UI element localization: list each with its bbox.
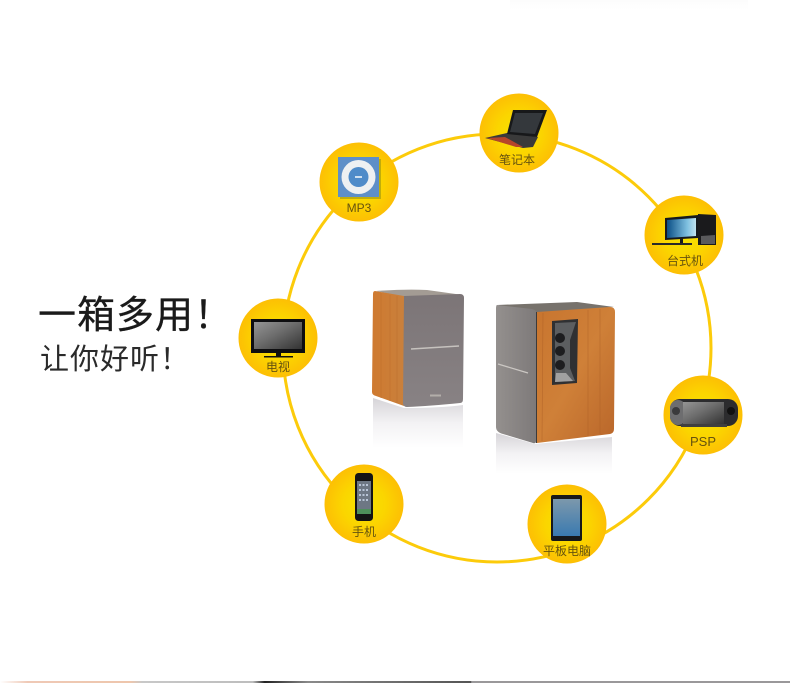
headline: 一箱多用！ <box>38 295 233 337</box>
icon: tablet <box>551 495 582 541</box>
icon: television <box>251 319 305 358</box>
subheading: 让你好听！ <box>40 343 190 376</box>
left speaker <box>372 290 464 407</box>
badge: MP3: MP3 <box>347 201 372 215</box>
icon: MP3 player <box>338 157 381 199</box>
faint top shadow <box>510 0 748 10</box>
badge: TV: 电视 <box>266 359 290 374</box>
badge: laptop: 笔记本 <box>499 152 535 167</box>
badge: phone: 手机 <box>352 525 376 539</box>
icon: laptop <box>485 110 547 148</box>
icon: smartphone <box>355 473 373 521</box>
badge: phone <box>324 464 404 544</box>
icon: desktop computer <box>652 214 716 245</box>
badge: PSP <box>664 376 742 454</box>
badge: TV <box>238 298 318 378</box>
badge: tablet: 平板电脑 <box>543 544 591 558</box>
icon: PSP console <box>670 399 738 427</box>
badge: MP3 <box>320 142 398 222</box>
bottom image strip <box>0 681 790 683</box>
badge: desktop <box>644 196 724 274</box>
connecting ring <box>283 134 711 562</box>
badge: desktop: 台式机 <box>667 253 703 268</box>
badge: tablet <box>528 484 606 564</box>
right speaker reflection <box>496 433 612 474</box>
badge: laptop <box>480 94 558 172</box>
left speaker reflection <box>373 398 463 448</box>
speaker pair <box>372 290 615 474</box>
badge: PSP: PSP <box>690 434 716 449</box>
right speaker <box>496 302 615 443</box>
control panel <box>552 319 578 385</box>
